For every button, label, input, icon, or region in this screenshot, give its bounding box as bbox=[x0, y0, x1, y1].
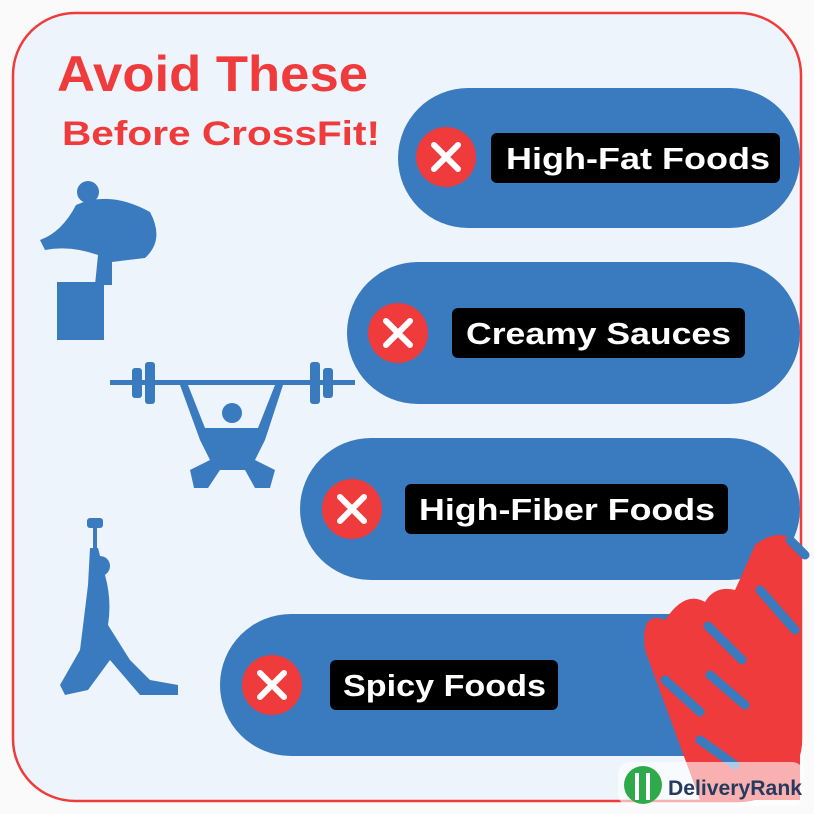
icon: box jump athlete bbox=[40, 181, 156, 340]
icon: red hand decoration bbox=[644, 535, 805, 800]
pill: high-fiber foods bbox=[300, 438, 800, 580]
pill: high-fat foods bbox=[398, 88, 800, 228]
pill: creamy sauces bbox=[347, 262, 800, 404]
pill: high-fiber foods: High-Fiber Foods bbox=[419, 492, 715, 527]
pill: high-fat foods: High-Fat Foods bbox=[506, 141, 770, 176]
logo: DeliveryRank: DeliveryRank bbox=[668, 777, 802, 800]
title bbox=[57, 46, 380, 153]
pill: spicy foods: Spicy Foods bbox=[343, 668, 546, 703]
pill: creamy sauces: Creamy Sauces bbox=[466, 316, 731, 351]
title: Avoid These bbox=[57, 46, 368, 102]
icon: lunging athlete with dumbbell bbox=[60, 518, 178, 695]
icon: weightlifter bbox=[110, 362, 355, 488]
logo: DeliveryRank bbox=[618, 762, 804, 806]
title: Before CrossFit! bbox=[62, 115, 380, 153]
pill: spicy foods bbox=[220, 614, 800, 756]
